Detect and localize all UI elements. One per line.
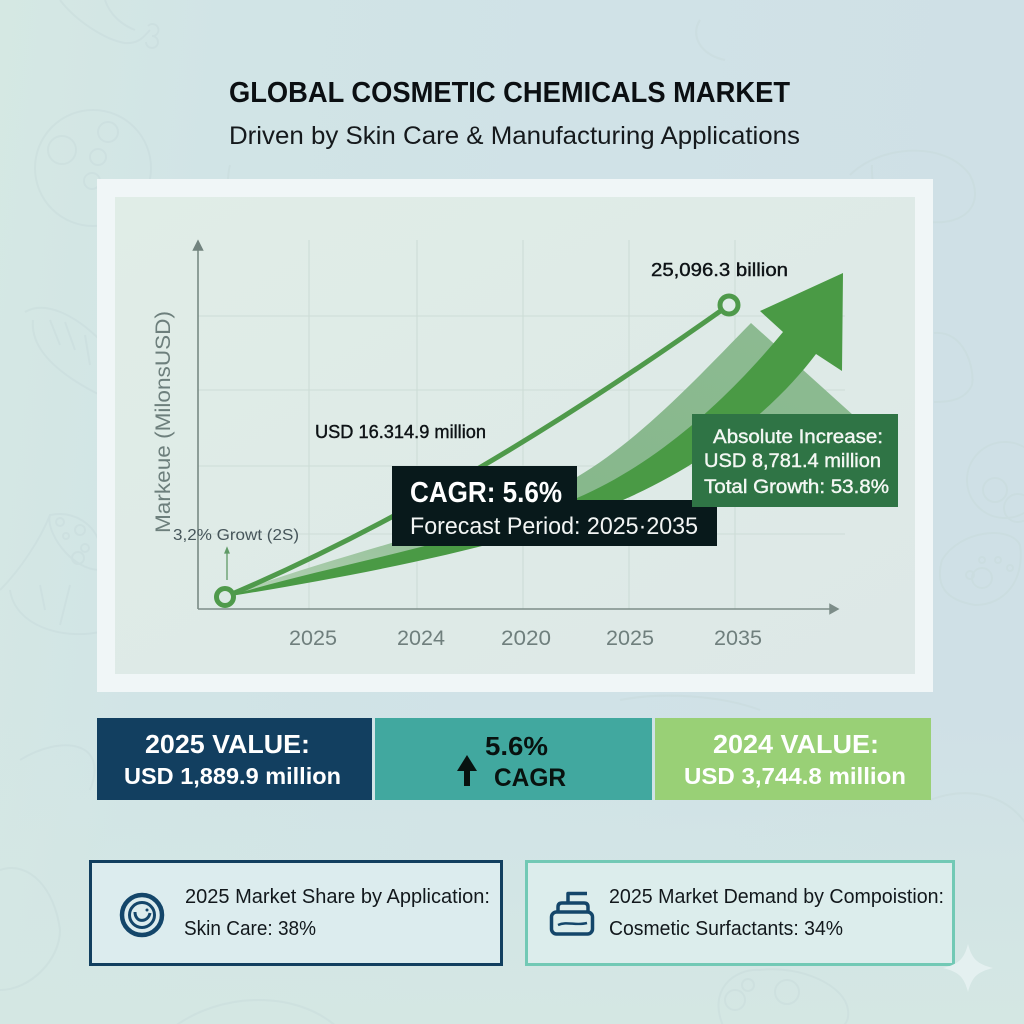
- card: market demand by composition: Cosmetic Surfactants: 34%: [609, 918, 843, 940]
- label: end value: 25,096.3 billion: [651, 260, 788, 280]
- callout: CAGR: [392, 466, 717, 546]
- start marker: [216, 588, 234, 606]
- callout: absolute increase: Absolute Increase:: [713, 427, 883, 448]
- x axis labels: [289, 627, 762, 650]
- chart plot area: [115, 197, 915, 674]
- callout: CAGR: CAGR: 5.6%: [410, 477, 562, 509]
- label: mid value: USD 16.314.9 million: [315, 422, 486, 442]
- stat: 2025 value: USD 1,889.9 million: [124, 763, 341, 789]
- callout: absolute increase: Total Growth: 53.8%: [704, 477, 889, 498]
- callout: CAGR: Forecast Period: 2025·2035: [410, 513, 698, 540]
- icon: up arrow: [457, 755, 477, 786]
- subtitle: Driven by Skin Care & Manufacturing Applications: [229, 122, 800, 150]
- title: GLOBAL COSMETIC CHEMICALS MARKET: [229, 77, 790, 109]
- stat: CAGR: 5.6%: [485, 731, 548, 761]
- stat: 2024 value: USD 3,744.8 million: [684, 763, 906, 789]
- x axis labels: 2035: [714, 627, 762, 650]
- callout: absolute increase: USD 8,781.4 million: [704, 451, 881, 472]
- growth line: [225, 305, 729, 597]
- stat: CAGR: [375, 718, 652, 800]
- icon: cream jar: [552, 894, 592, 934]
- card: market share by application: [90, 862, 502, 964]
- stat: 2024 value: [655, 718, 931, 800]
- y axis label: Markeue (MilonsUSD): [152, 311, 175, 533]
- stat: 2025 value: [97, 718, 372, 800]
- y axis: [194, 241, 202, 609]
- stat: CAGR: CAGR: [494, 764, 566, 792]
- light growth band: [225, 323, 853, 597]
- x axis labels: 2024: [397, 627, 445, 650]
- icon: skin care face: [122, 895, 162, 935]
- x axis labels: 2020: [501, 627, 551, 650]
- callout: absolute increase: [692, 414, 898, 507]
- small growth arrow: [225, 548, 229, 580]
- x axis labels: 2025: [606, 627, 654, 650]
- icon: sparkle: [943, 944, 993, 992]
- end marker: [720, 296, 738, 314]
- card: market share by application: 2025 Market Share by Application:: [185, 886, 490, 908]
- panel frame: [97, 179, 933, 692]
- stat: 2025 value: 2025 VALUE:: [145, 729, 310, 759]
- big growth arrow: [225, 273, 843, 597]
- x axis: [198, 604, 838, 614]
- card: market demand by composition: 2025 Market Demand by Compoistion:: [609, 886, 944, 908]
- card: market share by application: Skin Care: 38%: [184, 918, 316, 940]
- label: early growth: 3,2% Growt (2S): [173, 527, 299, 544]
- card: market demand by composition: [526, 862, 954, 964]
- panel: growth chart: [97, 179, 933, 692]
- stat: 2024 value: 2024 VALUE:: [713, 729, 879, 759]
- x axis labels: 2025: [289, 627, 337, 650]
